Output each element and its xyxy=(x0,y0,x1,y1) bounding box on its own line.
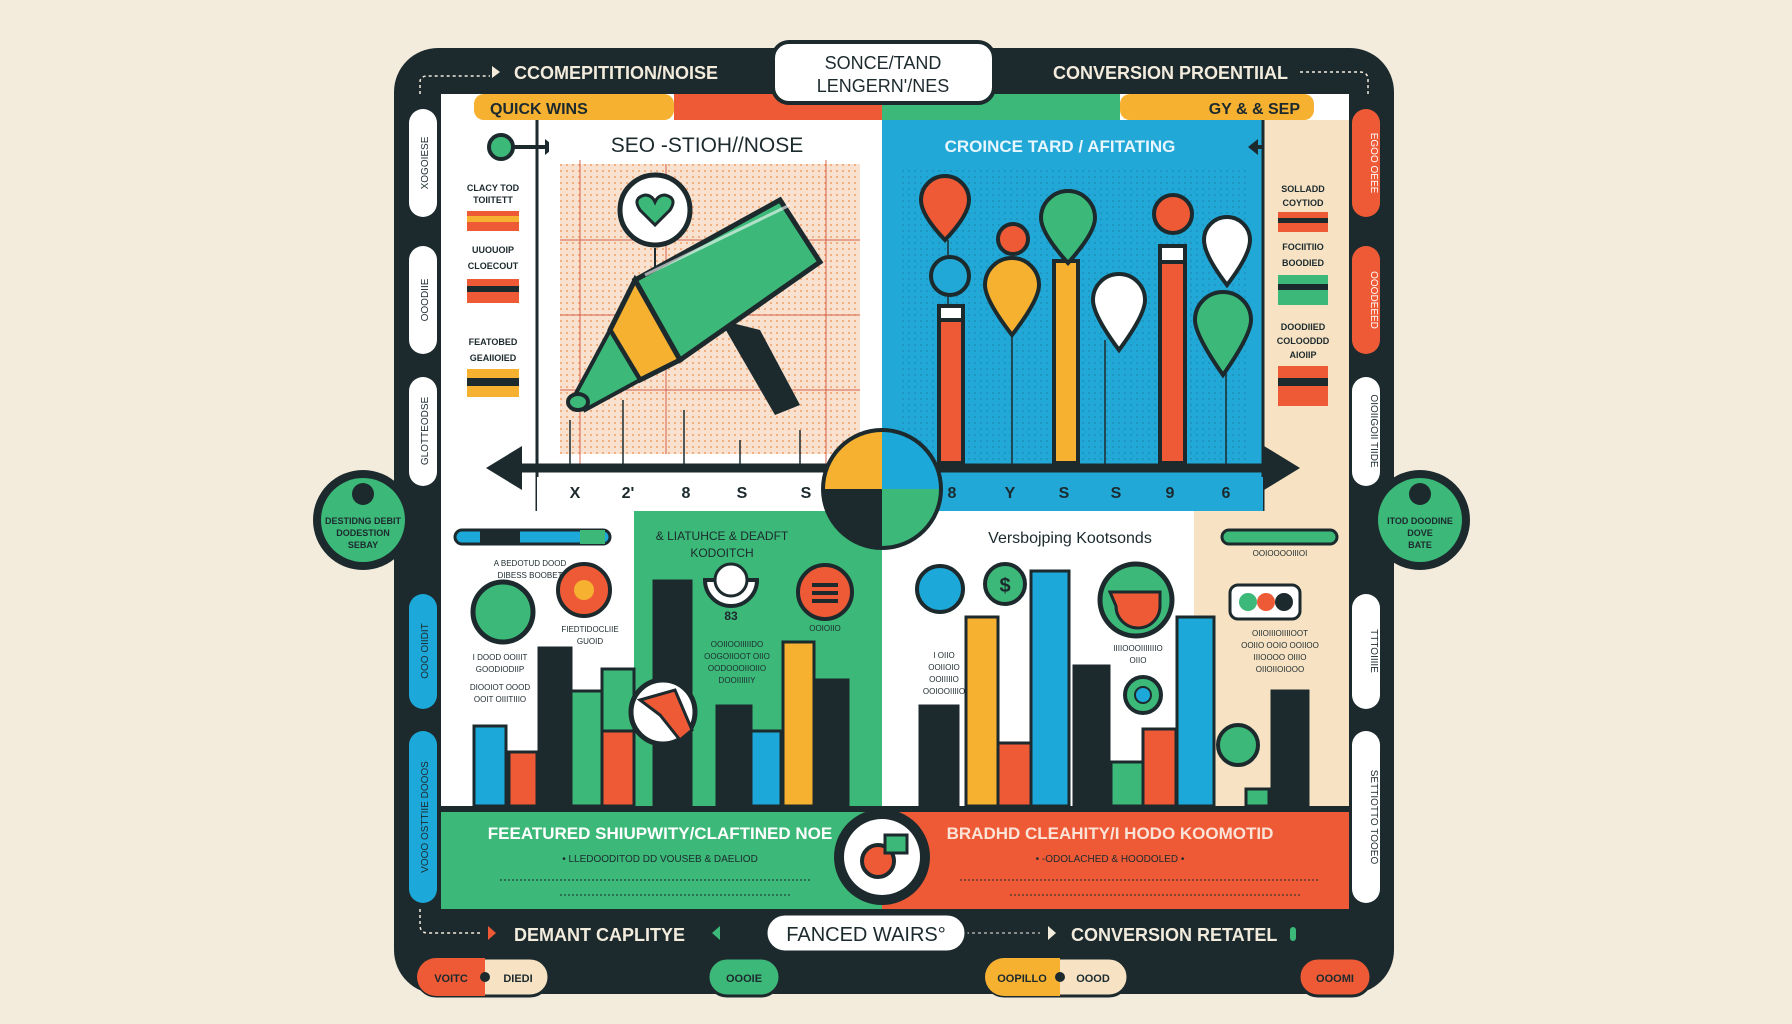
panel: bottom right white: IIIIOOOIIIIIIIO xyxy=(1113,644,1163,653)
bar chart: pins xyxy=(921,176,1251,463)
panel: right legend strip top: SOLLADD xyxy=(1281,184,1325,194)
panel: right legend strip top: DOODIIED xyxy=(1281,322,1326,332)
panel: bottom left white xyxy=(441,511,634,806)
panel: bottom right white: OOIIIIIO xyxy=(929,675,959,684)
panel: blue chart quadrant: CROINCE TARD / AFITATING xyxy=(945,137,1175,156)
panel: bottom right white: $ xyxy=(999,575,1011,597)
bar chart: bottom right xyxy=(920,571,1308,806)
panel: bottom right beige: OOIIO OOIO OOIIOO xyxy=(1241,641,1319,650)
axis arrow xyxy=(486,446,1300,511)
icon: megaphone hammer xyxy=(568,200,820,415)
panel: right legend strip top: BOODIED xyxy=(1282,258,1324,268)
bottom labels: DEMANT CAPLITYE xyxy=(514,925,685,945)
panel: right legend strip top: AIOIIP xyxy=(1289,350,1317,360)
footer pills: FESCE xyxy=(846,968,906,988)
left side pills: OOO OIIDIT xyxy=(420,623,431,679)
side bulge: right: DOVE xyxy=(1407,528,1433,538)
panel: bottom right beige: IIIOOOO OIIIO xyxy=(1254,653,1306,662)
right side pills: TTTOIIIIE xyxy=(1368,629,1379,673)
panel: bottom right white: OOIIOIO xyxy=(928,663,960,672)
top header labels: CONVERSION PROENTIIAL xyxy=(1053,63,1288,83)
panel: bottom right beige: OIIOIIOIOOO xyxy=(1256,665,1304,674)
panel: SEO chart quadrant xyxy=(549,120,882,511)
panel: bottom left white: OOIT OIIITIIIO xyxy=(474,695,526,704)
axis arrow: Y xyxy=(1005,485,1016,502)
axis arrow: S xyxy=(801,485,812,502)
bottom banner: red: • -ODOLACHED & HOODOLED • xyxy=(1036,854,1185,865)
side bulge: left: SEBAY xyxy=(348,540,378,550)
side bulge: right: BATE xyxy=(1408,540,1432,550)
icon: wrench circle xyxy=(631,680,695,744)
panel: bottom left white: I DOOD OOIIIT xyxy=(473,653,527,662)
top header labels: CCOMEPITITION/NOISE xyxy=(514,63,718,83)
footer pills: OOOD xyxy=(1076,973,1110,985)
axis arrow: 6 xyxy=(1222,485,1231,502)
icon: heart bubble xyxy=(620,175,690,290)
panel: bottom left green: DOOIIIIIIY xyxy=(719,676,756,685)
right side pills: EGOO OEEE xyxy=(1368,133,1379,194)
panel: left legend strip top: FEATOBED xyxy=(469,337,518,347)
axis arrow: 8 xyxy=(682,485,691,502)
panel: bottom left green xyxy=(634,511,882,806)
title pill: SONCE/TAND xyxy=(825,53,941,73)
footer pills: VOITC xyxy=(434,973,468,985)
panel: left legend strip top: CLOECOUT xyxy=(468,261,519,271)
pill: FANCED WAIRS: FANCED WAIRS° xyxy=(786,924,946,946)
panel: blue chart quadrant xyxy=(882,120,1307,511)
left side pills xyxy=(409,109,437,903)
panel: bottom right white: OIIO xyxy=(1130,656,1146,665)
axis arrow: S xyxy=(737,485,748,502)
panel: left legend strip top: GEAIIOIED xyxy=(470,353,517,363)
panel: bottom right white: OOIOOIIIIO xyxy=(923,687,965,696)
side bulge: left: DODESTION xyxy=(336,528,390,538)
panel: bottom left white: GOODIODIIP xyxy=(476,665,524,674)
panel: bottom left green: & LIATUHCE & DEADFT xyxy=(656,529,789,543)
bottom banner: green xyxy=(441,806,882,909)
bottom banner: red: BRADHD CLEAHITY/I HODO KOOMOTID xyxy=(947,824,1273,843)
panel: bottom left green: OODOOOIIOIIO xyxy=(708,664,766,673)
panel: bottom left white: A BEDOTUD DOOD xyxy=(494,559,566,568)
bar chart: bottom left xyxy=(474,581,848,806)
panel: bottom right white: I OIIO xyxy=(933,651,955,660)
bottom labels xyxy=(420,909,1296,945)
pill: FANCED WAIRS xyxy=(766,914,966,952)
outer frame xyxy=(394,48,1394,994)
panel: bottom left green: OOGOIIOOT OIIO xyxy=(704,652,770,661)
panel: bottom left white: DIBESS BOOBET xyxy=(498,571,563,580)
panel: bottom left white: GUOID xyxy=(577,637,603,646)
panel: bottom left green: KODOITCH xyxy=(690,546,754,560)
center quadrant circle xyxy=(821,428,943,550)
top color band: QUICK WINS xyxy=(490,101,588,118)
right side pills: OOODEEED xyxy=(1368,271,1379,329)
footer pills xyxy=(417,958,1371,996)
bottom labels: CONVERSION RETATEL xyxy=(1071,925,1277,945)
panel: bottom left green: OOIIOOIIIIIDO xyxy=(711,640,763,649)
panel: right legend strip top: FOCIITIIO xyxy=(1282,242,1324,252)
bottom banner: green: • LLEDOODITOD DD VOUSEB & DAELIOD xyxy=(562,854,758,865)
left side pills: OOODIIE xyxy=(420,278,431,321)
axis arrow: X xyxy=(570,485,581,502)
top color band xyxy=(474,94,1314,120)
title pill xyxy=(773,42,994,103)
axis arrow: 9 xyxy=(1166,485,1175,502)
panel: right legend strip top xyxy=(1263,120,1349,511)
panel: right legend strip top: COLOODDD xyxy=(1277,336,1330,346)
panel: bottom right beige xyxy=(1194,511,1349,806)
left side pills: VOOO OSTTIIE DOOOS xyxy=(420,761,431,873)
side bulge: right: ITOD DOODINE xyxy=(1387,516,1453,526)
footer pills: OOOMI xyxy=(1316,973,1354,985)
left side pills: XOGOIESE xyxy=(420,136,431,189)
top color band: GY & & SEP xyxy=(1209,101,1300,118)
axis arrow: 8 xyxy=(948,485,957,502)
side bulge: left: DESTIDNG DEBIT xyxy=(325,516,401,526)
axis arrow: 2' xyxy=(622,485,634,502)
top header labels xyxy=(420,63,1368,94)
footer pills: DIEDI xyxy=(503,973,533,985)
side bulge: left xyxy=(313,470,413,570)
footer pills: OOOIE xyxy=(726,973,762,985)
axis arrow: S xyxy=(1059,485,1070,502)
panel: left legend strip top: TOIITETT xyxy=(473,195,513,205)
axis arrow: S xyxy=(1111,485,1122,502)
panel: bottom left white: FIEDTIDOCLIIE xyxy=(561,625,619,634)
icon: center banner circle xyxy=(834,809,930,905)
bottom banner: red xyxy=(882,806,1349,909)
panel: bottom right beige: OIIOIIIOIIIIOOT xyxy=(1252,629,1308,638)
panel: right legend strip top: COYTIOD xyxy=(1282,198,1324,208)
right side pills: SETTIOTTO TOOEO xyxy=(1368,770,1379,864)
panel: left legend strip top: UUOUOIP xyxy=(472,245,514,255)
panel: bottom left white: DIOOIOT OOOD xyxy=(470,683,530,692)
right side pills xyxy=(1352,109,1380,903)
footer pills: OOPILLO xyxy=(997,973,1047,985)
panel: bottom left green: 83 xyxy=(724,609,738,623)
bottom banner: green: FEEATURED SHIUPWITY/CLAFTINED NOE xyxy=(488,824,832,843)
content area background xyxy=(441,94,1349,909)
panel: SEO chart quadrant: SEO -STIOH//NOSE xyxy=(611,134,803,157)
side bulge: right xyxy=(1370,470,1470,570)
left side pills: GLOTTEODSE xyxy=(420,397,431,465)
panel: left legend strip top: CLACY TOD xyxy=(467,183,520,193)
panel: left legend strip top xyxy=(441,120,555,511)
title pill: LENGERN'/NES xyxy=(817,76,949,96)
panel: bottom right white xyxy=(882,511,1194,806)
panel: bottom right white: Versbojping Kootsonds xyxy=(988,530,1152,547)
right side pills: OIOIIGOII TIIDE xyxy=(1368,394,1379,468)
panel: bottom left green: OOIOIIO xyxy=(809,624,841,633)
panel: bottom right beige: OOIOOOOIIIOI xyxy=(1253,549,1307,558)
